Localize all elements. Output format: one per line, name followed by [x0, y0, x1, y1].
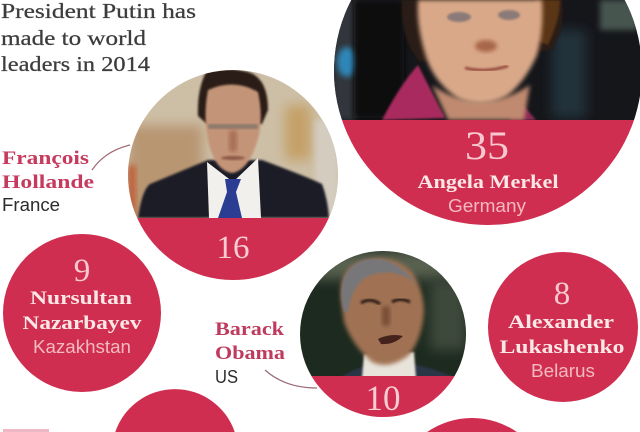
leader line: Hollande [92, 145, 130, 170]
count: 9: 9 [74, 253, 90, 289]
leader line: Obama [265, 370, 317, 388]
panel: Alexander Lukashenko [488, 252, 638, 402]
name: François Hollande: François [2, 148, 89, 169]
red segment: Hollande [137, 218, 329, 280]
name: Angela Merkel: Angela Merkel [418, 172, 558, 193]
name: François Hollande [2, 148, 94, 193]
name: Barack Obama [215, 319, 286, 364]
name: François Hollande: Hollande [2, 172, 94, 193]
red segment: Obama [311, 376, 455, 417]
title text [1, 0, 196, 76]
cropped circle: bottom centre-left [115, 389, 235, 432]
count: 35: 35 [465, 123, 509, 168]
name: Alexander Lukashenko: Alexander [508, 312, 615, 333]
cropped circle: bottom centre-right [427, 418, 517, 432]
panel: Barack Obama [215, 251, 466, 418]
red circle: Lukashenko [488, 252, 638, 402]
name: Alexander Lukashenko [500, 312, 624, 358]
name: Nursultan Nazarbayev: Nazarbayev [22, 313, 142, 334]
count: 8: 8 [554, 276, 570, 312]
name: Alexander Lukashenko: Lukashenko [500, 337, 624, 358]
country: US: US [215, 366, 238, 387]
photo: Merkel [332, 0, 640, 120]
panel: François Hollande [2, 69, 338, 280]
title text: leaders in 2014 [1, 52, 151, 76]
panel: Angela Merkel [332, 0, 640, 225]
red circle: Nazarbayev [3, 234, 161, 392]
count: 16: 16 [216, 230, 250, 266]
title text: made to world [1, 26, 147, 50]
country: Germany: Germany [448, 195, 527, 216]
red segment: Merkel [342, 120, 634, 225]
photo: Hollande [128, 69, 338, 220]
name: Nursultan Nazarbayev [22, 288, 142, 334]
photo: Obama [300, 251, 466, 378]
country: Kazakhstan: Kazakhstan [33, 336, 131, 357]
name: Barack Obama: Obama [215, 343, 286, 364]
name: Nursultan Nazarbayev: Nursultan [30, 288, 133, 309]
name: Barack Obama: Barack [215, 319, 285, 340]
country: France: France [2, 194, 60, 215]
count: 10: 10 [366, 378, 400, 418]
panel: Nursultan Nazarbayev [3, 234, 161, 392]
cropped label: bottom left [3, 429, 49, 432]
country: Belarus: Belarus [531, 360, 595, 381]
